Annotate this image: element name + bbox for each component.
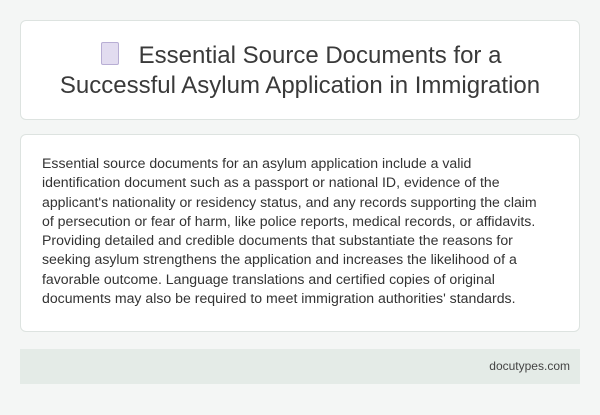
text block: documents may also be required to meet immigration authorities' standards.: [42, 290, 516, 306]
text block: Providing detailed and credible documents that substantiate the reasons for: [42, 232, 513, 248]
title: Essential Source Documents for a: [139, 42, 501, 69]
footer text: docutypes.com: [489, 359, 570, 373]
text block: of persecution or fear of harm, like police reports, medical records, or affidavits.: [42, 213, 535, 229]
text block: Essential source documents for an asylum application include a valid: [42, 155, 471, 171]
text block: identification document such as a passport or national ID, evidence of the: [42, 174, 500, 190]
text block: favorable outcome. Language translations and certified copies of original: [42, 271, 495, 287]
panel: title card: [20, 20, 580, 120]
text block: [42, 155, 537, 306]
panel: description: [20, 134, 580, 332]
title: [60, 42, 540, 99]
title: Successful Asylum Application in Immigration: [60, 72, 540, 99]
text block: applicant's nationality or residency status, and any records supporting the claim: [42, 194, 537, 210]
icon: document: [101, 42, 119, 65]
footer: [20, 349, 580, 384]
text block: seeking asylum strengthens the application and increases the likelihood of a: [42, 251, 517, 267]
